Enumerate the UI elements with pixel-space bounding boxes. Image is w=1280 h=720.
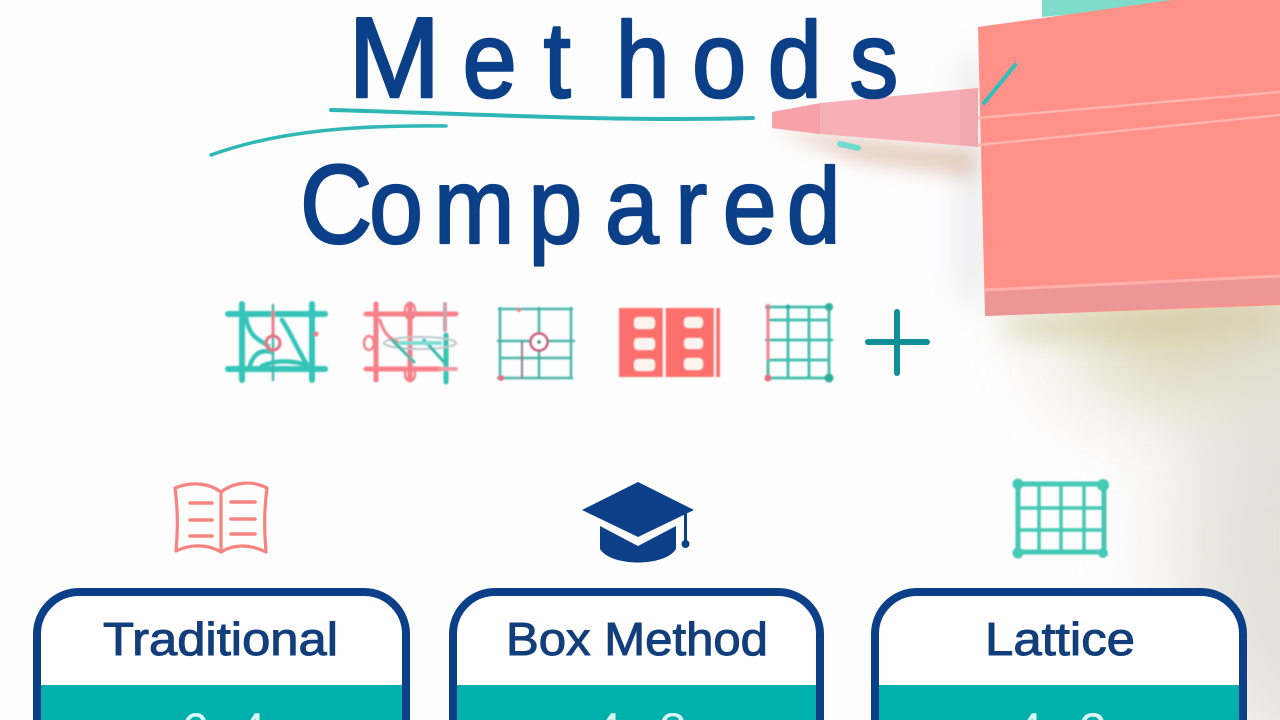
card heading: Traditional — [103, 613, 338, 665]
pen tip — [772, 104, 820, 134]
icon: graduation cap — [582, 482, 694, 562]
card: Lattice — [875, 592, 1243, 720]
title: Compared: p — [528, 145, 582, 266]
title: Methods: o — [692, 0, 746, 120]
title: Compared: m — [434, 145, 515, 266]
title: Compared: o — [369, 145, 423, 266]
pen shadow — [770, 128, 975, 178]
title underline strokes — [211, 110, 753, 155]
icon: plus — [868, 312, 927, 373]
card heading: Box Method — [506, 613, 768, 665]
icon row — [228, 303, 927, 382]
card: Box Method — [453, 592, 820, 720]
pen body — [772, 88, 978, 147]
title: Methods: e — [463, 0, 517, 120]
icon: square grid with dots — [764, 303, 834, 382]
pink block — [978, 0, 1280, 316]
block creases — [978, 92, 1280, 118]
title: Compared: a — [605, 145, 660, 266]
icon: lattice grid — [1012, 478, 1109, 558]
teal band — [41, 685, 402, 720]
teal band — [879, 685, 1239, 720]
teal tick on block — [984, 65, 1015, 103]
title: Methods — [348, 0, 898, 121]
pen and pink block illustration — [770, 0, 1280, 316]
title: Methods: t — [544, 0, 571, 120]
background shadow beneath the pink block — [958, 60, 1280, 720]
teal band — [457, 685, 816, 720]
icon: open book — [175, 483, 267, 552]
pen collar — [960, 88, 978, 147]
title: Compared: e — [723, 145, 777, 266]
block flange — [985, 276, 1280, 316]
icon: coral multiplication grid — [364, 303, 456, 382]
icon: thin grid with circled centre — [498, 308, 574, 381]
card: Traditional — [37, 592, 406, 720]
icon: teal multiplication grid — [228, 304, 325, 380]
title: Methods: d — [768, 0, 822, 120]
title: Compared: r — [675, 145, 707, 266]
title: Methods: s — [850, 0, 898, 120]
card heading: Lattice — [985, 613, 1135, 665]
title: Compared: C — [300, 142, 372, 267]
title: Methods: h — [616, 0, 670, 120]
teal dash under pen — [840, 144, 858, 148]
icon: coral filled book — [619, 308, 720, 377]
teal block behind pink block — [1042, 0, 1225, 17]
title: Compared: d — [787, 145, 841, 266]
